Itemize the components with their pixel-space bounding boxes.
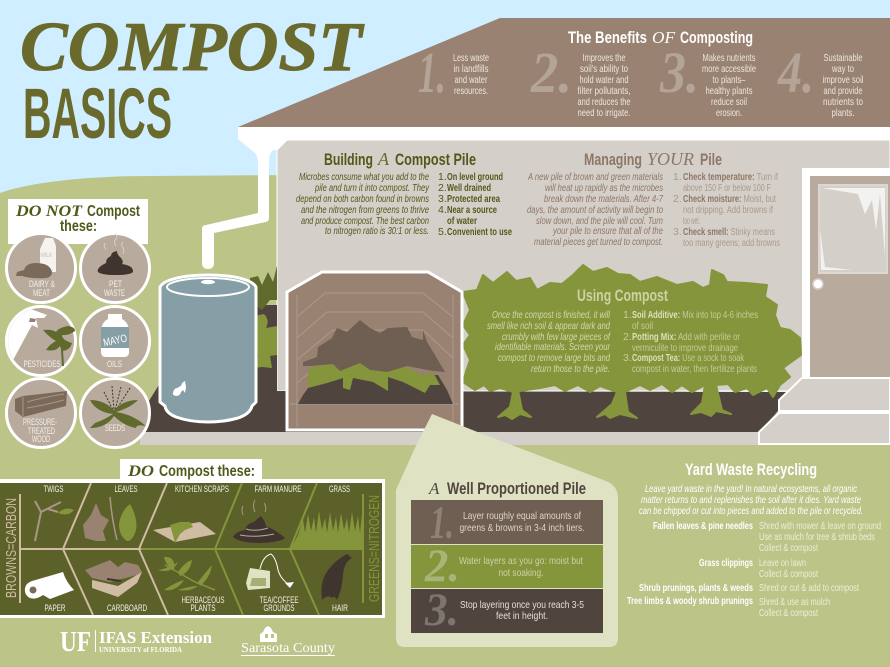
item: kitchen scraps — [153, 484, 229, 543]
benefit 4: improve soil — [822, 74, 864, 86]
panel: building a compost pile: 2. — [438, 182, 447, 194]
benefit 4: 4. — [777, 40, 814, 105]
text: using compost paragraph: crumbly with few large pieces of — [502, 331, 611, 343]
panel: do compost these — [0, 459, 385, 618]
item: cardboard — [82, 560, 147, 613]
panel: building a compost pile — [296, 149, 512, 238]
heading: benefits — [568, 28, 753, 47]
step 3: feet in height. — [496, 610, 548, 622]
rain barrel — [160, 275, 256, 422]
title: COMPOST — [20, 9, 365, 86]
text: using compost paragraph: identifiable materials. Screen your — [495, 341, 610, 353]
panel: managing your pile: A new pile of brown and green materials — [527, 171, 664, 183]
table: materials — [627, 520, 753, 607]
heading: well proportioned pile — [428, 479, 586, 498]
item: farm manure: FARM MANURE — [254, 484, 302, 494]
icon: pet waste — [80, 234, 150, 302]
panel: managing your pile: too wet. — [683, 215, 700, 227]
side label: greens nitrogen: GREENS=NITROGEN — [366, 495, 383, 602]
list: ways to use compost: 2. — [623, 331, 632, 343]
benefit 1: and water — [454, 74, 488, 86]
benefit 2: need to irrigate. — [578, 107, 630, 119]
icon: pet waste: WASTE — [104, 288, 125, 298]
panel: building a compost pile: Compost Pile — [395, 150, 476, 169]
panel: managing your pile: 2. — [673, 193, 682, 205]
door — [802, 168, 890, 380]
table: materials: Grass clippings — [699, 557, 753, 569]
panel: building a compost pile: to nitrogen ratio is 30:1 or less. — [325, 225, 429, 237]
heading: do compost these: Compost these: — [159, 463, 255, 480]
panel: do not compost heading — [8, 199, 148, 244]
panel: building a compost pile: Well drained — [447, 182, 491, 194]
logo: Sarasota County: Sarasota County — [241, 641, 335, 656]
benefit 2: 2. — [530, 40, 572, 105]
logo: UF IFAS Extension: UF — [60, 626, 91, 658]
logo: UF IFAS Extension: UNIVERSITY of FLORIDA — [99, 646, 182, 654]
benefit 4: nutrients to — [823, 96, 863, 108]
list: ways to use compost: Compost Tea: Use a sock to soak — [632, 352, 745, 364]
step 1: Layer roughly equal amounts of — [463, 510, 581, 522]
panel: managing your pile: Check temperature: Turn if — [683, 171, 778, 183]
item: kitchen scraps: KITCHEN SCRAPS — [175, 484, 229, 494]
benefit 1: in landfills — [454, 63, 488, 75]
panel: building a compost pile: A — [377, 149, 390, 169]
eave and downspout — [202, 127, 890, 269]
icon: oils mayo jar: OILS — [107, 359, 122, 369]
benefit 3: 3. — [659, 40, 699, 105]
item: tea bag: GROUNDS — [264, 603, 294, 613]
heading: benefits: OF — [652, 28, 676, 47]
panel: building a compost pile: Building — [324, 150, 373, 169]
heading: well proportioned pile: Well Proportioned Pile — [447, 479, 586, 498]
item: leaves: LEAVES — [114, 484, 138, 494]
panel: building a compost pile: Protected area — [447, 193, 500, 205]
panel: managing your pile: YOUR — [647, 149, 694, 169]
panel: building a compost pile: 3. — [438, 193, 447, 205]
item: grass: GRASS — [329, 484, 350, 494]
icon: oils mayo jar: MAYO — [102, 333, 129, 349]
benefit 4: way to — [831, 63, 854, 75]
text: using compost paragraph: Once the compost is finished, it will — [492, 309, 610, 321]
panel: building a compost pile: 5. — [438, 226, 447, 238]
panel: building a compost pile: and the nitrogen from greens to thrive — [301, 204, 429, 216]
panel: building a compost pile: Convenient to use — [447, 226, 512, 238]
panel: building a compost pile: and produce compost. The best carbon — [301, 215, 429, 227]
side label: browns carbon: BROWNS=CARBON — [3, 498, 20, 598]
item: twigs — [35, 484, 74, 541]
item: herbaceous plants: HERBACEOUS — [182, 595, 224, 605]
panel: managing your pile — [527, 149, 780, 249]
panel: managing your pile: slow down, and the pile will cool. Turn — [536, 215, 663, 227]
panel: building a compost pile: of water — [447, 215, 477, 227]
icon: oils mayo jar — [80, 306, 150, 376]
panel: managing your pile: Managing — [584, 150, 642, 169]
benefit 1: Less waste — [453, 52, 489, 64]
item: herbaceous plants — [158, 557, 224, 613]
icon: seeds: SEEDS — [105, 423, 125, 433]
panel: managing your pile: above 150 F or below 100 F — [683, 182, 771, 194]
list: ways to use compost: Potting Mix: Add with perlite or — [632, 331, 740, 343]
benefit 1 — [418, 40, 489, 105]
compost bin — [287, 272, 462, 430]
pile: green layer — [308, 362, 440, 393]
table: actions: Collect & compost — [759, 542, 818, 554]
panel: do not compost heading: DO NOT — [15, 203, 83, 220]
panel: yard waste recycling: Yard Waste Recycling — [685, 460, 817, 479]
panel: building a compost pile: pile and turn it into compost. They — [314, 182, 430, 194]
icon: pesticides: PESTICIDES — [24, 359, 60, 369]
shrubs behind barrel — [250, 266, 277, 368]
benefit 3: healthy plants — [706, 85, 752, 97]
item: farm manure — [233, 484, 302, 543]
benefit 2: and reduces the — [578, 96, 631, 108]
list: ways to use compost — [623, 309, 758, 375]
ground and sidewalk — [140, 305, 787, 445]
text: using compost paragraph: return those to the pile. — [531, 363, 610, 375]
benefit 3: Makes nutrients — [702, 52, 756, 64]
benefit 4: plants. — [832, 107, 854, 119]
step 3: 3. — [424, 584, 459, 636]
logo: UF IFAS Extension: IFAS Extension — [99, 628, 213, 647]
table: materials: Tree limbs & woody shrub prunings — [627, 595, 753, 607]
item: paper: PAPER — [44, 603, 66, 613]
title — [20, 9, 365, 154]
list: ways to use compost: vermiculite to improve drainage — [632, 342, 738, 354]
heading: benefits: Composting — [680, 28, 753, 47]
panel: managing your pile: will heat up rapidly as the microbes — [545, 182, 664, 194]
table: actions: Leave on lawn — [759, 557, 806, 569]
text: intro — [639, 483, 863, 517]
panel: managing your pile: days, the amount of activity will begin to — [527, 204, 663, 216]
table: actions: Collect & compost — [759, 607, 818, 619]
panel: do not compost heading: Compost — [87, 203, 141, 220]
heading: benefits: The Benefits — [568, 28, 647, 47]
benefit 2: hold water and — [580, 74, 629, 86]
pile: dark base layer — [298, 373, 453, 404]
panel: do not compost heading: these: — [60, 218, 97, 235]
step 2: 2. — [424, 540, 460, 592]
icon: pet waste: PET — [109, 279, 122, 289]
heading: do compost these: DO — [127, 463, 155, 480]
heading: do compost these — [127, 463, 255, 480]
benefit 4: and provide — [824, 85, 863, 97]
panel: building a compost pile: 1. — [438, 171, 447, 183]
item: tea bag: TEA/COFFEE — [260, 595, 298, 605]
text: using compost paragraph — [487, 309, 611, 375]
table: actions: Collect & compost — [759, 568, 818, 580]
logo: UF IFAS Extension — [60, 626, 213, 658]
panel: managing your pile: Check smell: Stinky means — [683, 226, 775, 238]
list: ways to use compost: 3. — [623, 352, 632, 364]
title: BASICS — [23, 75, 172, 154]
table: materials: Shrub prunings, plants & weeds — [639, 582, 753, 594]
panel: building a compost pile: On level ground — [447, 171, 503, 183]
panel: managing your pile: break down the materials. After 4-7 — [544, 193, 664, 205]
step 1: greens & browns in 3-4 inch tiers. — [460, 522, 584, 534]
step 1 — [411, 497, 603, 549]
step 2 — [411, 540, 603, 592]
list: ways to use compost: 1. — [623, 309, 632, 321]
divider lines — [20, 483, 363, 615]
item: leaves — [83, 484, 138, 541]
panel: building a compost pile: Microbes consume what you add to the — [299, 171, 429, 183]
icon: pressure treated wood: TREATED — [28, 426, 55, 436]
heading: well proportioned pile: A — [428, 479, 440, 498]
benefit 3: more accessible — [702, 63, 756, 75]
panel: managing your pile: too many greens; add browns — [683, 237, 780, 249]
icon: spigot — [173, 381, 186, 396]
panel: building a compost pile: 4. — [438, 204, 447, 216]
benefit 3: erosion. — [716, 107, 742, 119]
item: tea bag — [246, 554, 298, 613]
icon: pressure treated wood — [6, 378, 76, 448]
pile: brown layer — [303, 320, 445, 372]
panel: building a compost pile: Near a source — [447, 204, 497, 216]
item: hair: HAIR — [332, 603, 348, 613]
step 2: Water layers as you go: moist but — [459, 555, 583, 567]
list: ways to use compost: compost in water, then fertilize plants — [632, 363, 757, 375]
panel: managing your pile: not dripping. Add browns if — [683, 204, 773, 216]
item: cardboard: CARDBOARD — [107, 603, 147, 613]
step 1: 1. — [430, 497, 454, 549]
icon: pesticides — [0, 306, 76, 376]
panel: a well proportioned pile — [396, 414, 618, 647]
item: twigs: TWIGS — [44, 484, 64, 494]
item: grass — [291, 484, 362, 548]
panel: managing your pile: material pieces get turned to compost. — [534, 236, 663, 248]
icon: dairy and meat: MILK — [40, 253, 52, 259]
steps — [759, 378, 890, 444]
panel: roof with benefits of composting — [238, 18, 890, 127]
house wall — [277, 140, 890, 391]
list: ways to use compost: Soil Additive: Mix into top 4-6 inches — [632, 309, 758, 321]
benefit 2: soil's ability to — [580, 63, 628, 75]
benefit 3 — [659, 40, 756, 119]
benefit 1: 1. — [418, 40, 446, 105]
table: actions — [759, 520, 881, 619]
table: materials: Fallen leaves & pine needles — [653, 520, 753, 532]
item: herbaceous plants: PLANTS — [190, 603, 216, 613]
icon: seeds — [80, 378, 150, 448]
panel: managing your pile: 3. — [673, 226, 682, 238]
text: using compost paragraph: compost to remove large bits and — [498, 352, 611, 364]
lawn — [0, 175, 890, 667]
panel: managing your pile: your pile to ensure that all of the — [552, 225, 663, 237]
benefit 3: reduce soil — [711, 96, 747, 108]
icon: pressure treated wood: PRESSURE- — [23, 417, 57, 427]
step 3 — [411, 584, 603, 636]
logo: Sarasota County — [241, 626, 335, 656]
benefit 3: to plants– — [712, 74, 746, 86]
benefit 1: resources. — [454, 85, 488, 97]
item: hair — [321, 554, 352, 613]
panel: building a compost pile: depend on both carbon found in browns — [296, 193, 430, 205]
panel: managing your pile: Pile — [700, 150, 722, 169]
step 3: Stop layering once you reach 3-5 — [460, 599, 584, 611]
benefit 2: filter pollutants, — [578, 85, 630, 97]
heading: using compost: Using Compost — [577, 286, 668, 305]
panel: managing your pile: 1. — [673, 171, 682, 183]
bush panel: using compost — [463, 265, 801, 419]
benefit 4: Sustainable — [824, 52, 863, 64]
icon: dairy and meat — [6, 234, 76, 302]
item: paper — [25, 572, 74, 613]
benefit 2: Improves the — [582, 52, 626, 64]
icon: dairy and meat: DAIRY & — [29, 279, 55, 289]
step 2: not soaking. — [498, 567, 544, 579]
list: ways to use compost: of soil — [632, 320, 653, 332]
benefit 2 — [530, 40, 631, 119]
panel: managing your pile: Check moisture: Moist, but — [683, 193, 776, 205]
icon: pressure treated wood: WOOD — [32, 434, 50, 444]
table: actions: Shred & use as mulch — [759, 596, 830, 608]
icon: dairy and meat: MEAT — [33, 288, 50, 298]
panel: yard waste recycling — [627, 460, 881, 619]
benefit 4 — [777, 40, 864, 119]
text: using compost paragraph: smell like rich soil & appear dark and — [487, 320, 611, 332]
